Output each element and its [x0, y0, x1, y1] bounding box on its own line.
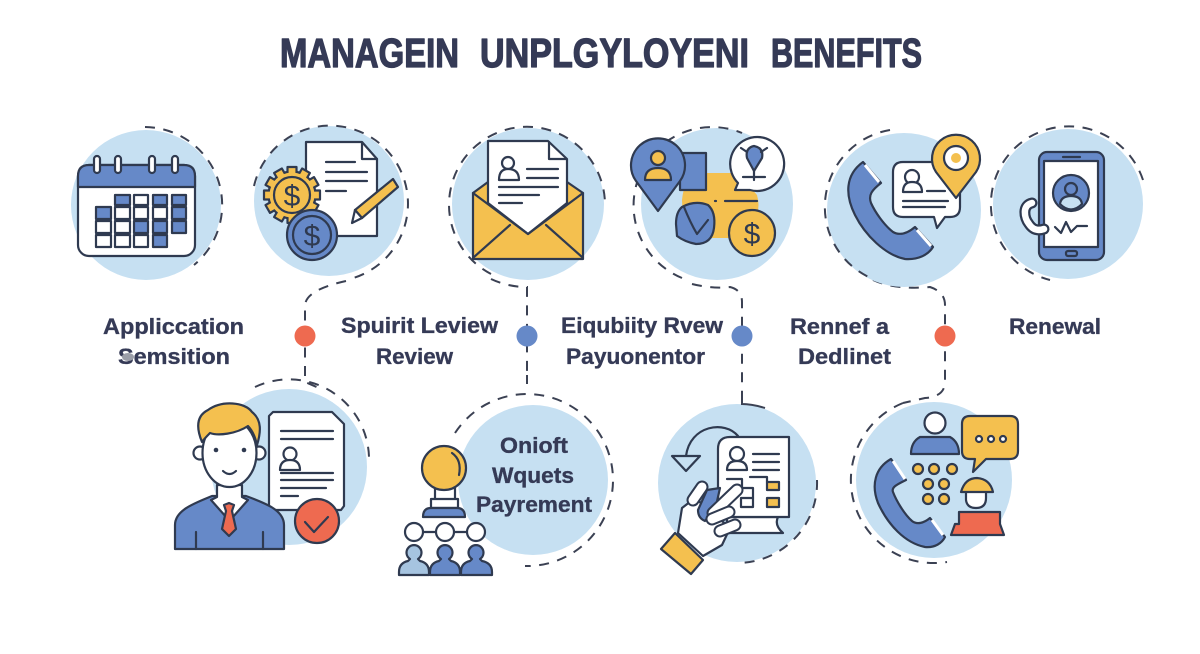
label: review: Review: [376, 344, 453, 369]
label: deadline: Rennef a: [790, 314, 889, 339]
panel: eligibility icons: [631, 127, 793, 280]
icon: idea bubble: [730, 137, 784, 191]
title: UNPLGYLOYENI: [480, 30, 749, 76]
label: eligibility: Eiqubiity Rvew: [561, 313, 724, 338]
label: review: [341, 313, 499, 369]
icon: chat bubble: [962, 416, 1018, 472]
connector: envelope circle to bottom stamp panel: [491, 279, 527, 384]
label: renewal: Renewal: [1009, 314, 1101, 339]
connector: phone circle to bottom phone panel: [873, 280, 945, 403]
icon: blue square: [680, 153, 706, 190]
marker: blue dot two: [516, 326, 538, 346]
panel: call center: [851, 402, 1018, 563]
panel: phone and chat: [825, 130, 981, 287]
panel: calendar: [71, 127, 222, 280]
panel: smartphone: [991, 126, 1143, 280]
icon: dollar coin: $: [744, 218, 761, 251]
connector: eligibility circle to bottom document panel: [692, 284, 742, 404]
icon: agent: [911, 412, 959, 454]
label: deadline: Dedlinet: [798, 344, 892, 369]
icon: dollar coin: [729, 210, 775, 256]
text: payment label: Onioft: [500, 433, 569, 458]
text: payment label: [476, 433, 593, 517]
icon: envelope: [473, 141, 583, 259]
title: MANAGEIN: [280, 30, 459, 76]
icon: handset: [848, 162, 933, 259]
title: [280, 30, 922, 76]
connector: second circle to bottom person panel: [305, 281, 346, 388]
title: BENEFITS: [771, 30, 922, 76]
label: eligibility: Payuonentor: [566, 344, 705, 369]
panel: document review hand: [658, 397, 817, 574]
label: deadline: [790, 314, 892, 369]
icon: worker: [951, 478, 1004, 535]
icon: person pin: [631, 138, 685, 211]
label: eligibility: [561, 313, 724, 369]
icon: hand with cuff: [661, 487, 737, 574]
text: payment label: Wquets: [492, 463, 574, 488]
marker: blue dot three: [732, 326, 752, 346]
icon: gear coin: [264, 167, 320, 223]
icon: large handset: [875, 459, 945, 547]
icon: pencil: [352, 179, 398, 223]
panel: applicant: [175, 379, 369, 549]
label: application: Semsition: [118, 344, 230, 369]
panel: document with coins: [254, 126, 408, 279]
marker: red dot one: [294, 326, 316, 346]
icon: flow document: [718, 437, 789, 533]
icon: small handset: [1025, 203, 1044, 230]
icon: smartphone: [1039, 152, 1104, 260]
icon: blue coin: [287, 210, 337, 260]
panel: payment: [399, 375, 613, 575]
marker: red dot four: [934, 326, 956, 346]
icon: gear coin: $: [284, 180, 301, 213]
icon: contact bubble: [893, 162, 960, 228]
icon: return arrow: [672, 427, 738, 471]
label: application: [103, 314, 244, 369]
icon: blue head: [676, 203, 714, 244]
icon: approval check: [295, 499, 339, 543]
icon: document: [306, 142, 377, 236]
icon: blue coin: $: [304, 220, 321, 253]
label: application: Appliccation: [103, 314, 244, 339]
icon: stamp: [422, 446, 466, 517]
label: review: Spuirit Leview: [341, 313, 499, 338]
icon: calendar: [78, 156, 195, 256]
text: payment label: Payrement: [476, 492, 593, 517]
icon: yellow box: [682, 173, 758, 238]
icon: resume: [269, 412, 344, 510]
panel: envelope: [449, 127, 605, 280]
icon: keypad dots: [913, 464, 957, 504]
icon: location pin: [932, 135, 980, 198]
icon: man in suit: [175, 403, 284, 549]
icon: network of people: [399, 523, 492, 575]
